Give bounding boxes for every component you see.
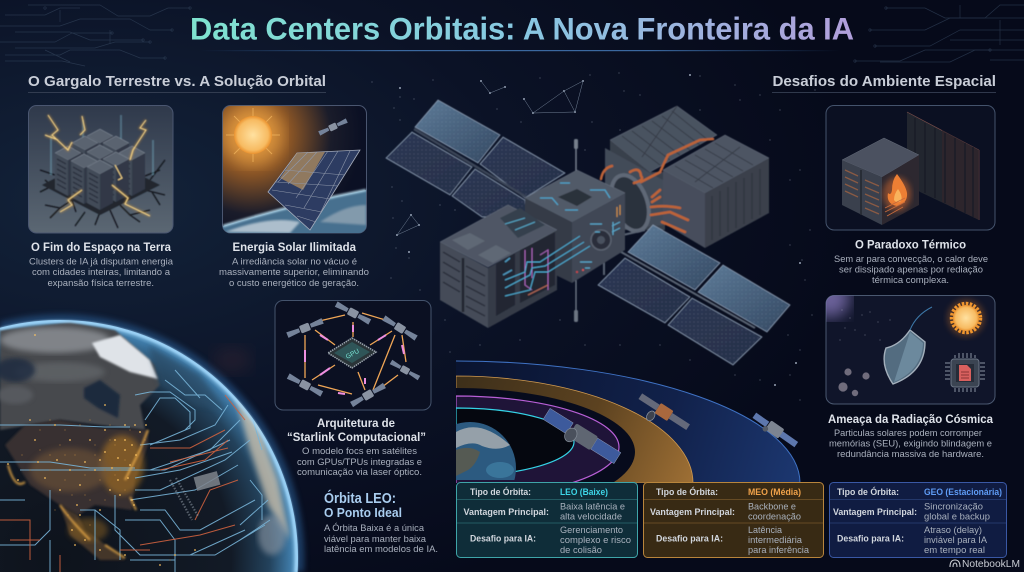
icon: satellite <box>318 118 348 136</box>
table: LEO: de colisão <box>560 545 602 556</box>
text: órbita LEO: O Ponto Ideal <box>324 505 402 520</box>
table: LEO: Tipo de Órbita: <box>470 486 531 498</box>
title: Data Centers Orbitais: A Nova Fronteira da IA <box>190 10 854 46</box>
icon: server cluster with cracks and lightning <box>40 115 165 228</box>
laser links <box>305 313 406 394</box>
text: órbita LEO <box>324 489 438 555</box>
table: MEO: para inferência <box>748 545 810 556</box>
text: starlink computacional: Arquitetura de <box>317 418 395 430</box>
icon: memory chip <box>945 353 985 392</box>
main earth illustration <box>0 314 304 572</box>
icon: LEO satellite <box>540 407 622 469</box>
central module <box>525 170 625 283</box>
text: radiação cósmica: Ameaça da Radiação Cósmica <box>828 414 994 426</box>
icon: gpu chip: GPU <box>345 348 361 361</box>
table: LEO: complexo e risco <box>560 535 631 546</box>
decorative circuit traces top-left <box>0 5 191 66</box>
icon: solar particles <box>838 368 870 396</box>
text: fim do espaço: expansão física terrestre. <box>48 278 154 289</box>
GEO orbit line <box>456 361 800 483</box>
table: MEO: intermediária <box>748 535 803 546</box>
text: energia solar: Energia Solar Ilimitada <box>232 242 357 254</box>
table: LEO: Vantagem Principal: <box>464 507 549 518</box>
array boom <box>600 230 755 328</box>
heading: desafios: Desafios do Ambiente Espacial <box>772 73 996 90</box>
table: MEO: Latência <box>748 525 783 536</box>
icon: radiator <box>907 112 979 220</box>
text: starlink computacional: com GPUs/TPUs integradas e <box>297 457 422 468</box>
icon: gpu chip <box>328 338 376 368</box>
icon: sun <box>947 299 985 337</box>
decorative circuit traces top-right <box>854 5 1024 62</box>
icon: solar panel <box>268 150 360 230</box>
table: GEO: global e backup <box>924 512 990 522</box>
table: GEO: inviável para IA <box>924 535 988 546</box>
text: fim do espaço: O Fim do Espaço na Terra <box>31 242 172 254</box>
icon: shield <box>884 307 932 384</box>
constellations <box>397 81 583 235</box>
solar array: lower right <box>598 225 790 365</box>
text: órbita LEO: Órbita LEO: <box>324 489 396 507</box>
icon: GEO satellite <box>750 411 799 451</box>
icon: MEO satellite <box>632 391 691 441</box>
table: MEO: Vantagem Principal: <box>650 507 735 518</box>
table: MEO: coordenação <box>748 512 801 522</box>
table: GEO: Vantagem Principal: <box>833 507 917 518</box>
text: paradoxo térmico: Sem ar para convecção, o calor deve <box>834 254 988 265</box>
text: starlink computacional: comunicação via laser óptico. <box>297 467 422 478</box>
table: GEO: Desafio para IA: <box>837 534 904 544</box>
text: órbita LEO: latência em modelos de IA. <box>324 544 438 555</box>
table: LEO: alta velocidade <box>560 512 622 522</box>
table: GEO: Sincronização <box>924 502 983 512</box>
table: MEO: Tipo de Órbita: <box>656 486 718 498</box>
icon: sun <box>223 105 283 165</box>
text: órbita LEO: viável para manter baixa <box>324 534 427 545</box>
text: energia solar <box>219 242 369 289</box>
icon: overheating cube <box>842 138 919 225</box>
text: energia solar: massivamente superior, eliminando <box>219 267 369 278</box>
table: GEO: GEO (Estacionária) <box>924 487 1002 498</box>
table: LEO: Gerenciamento <box>560 525 623 536</box>
text: fim do espaço <box>29 242 174 289</box>
MEO inner gap <box>456 388 635 482</box>
coolant pipes <box>601 139 713 232</box>
text: starlink computacional: “Starlink Computacional” <box>287 432 426 444</box>
text: fim do espaço: com cidades inteiras, limitando a <box>32 267 171 278</box>
solar array: upper left <box>386 100 565 217</box>
text: órbita LEO: A Órbita Baixa é a única <box>324 523 425 534</box>
GEO orbit band <box>456 361 800 483</box>
radiator block: front <box>663 135 769 248</box>
text: radiação cósmica: memórias (SEU), exigindo blindagem e <box>829 438 992 450</box>
icons: satellites <box>286 301 421 408</box>
server module <box>440 205 590 328</box>
table: GEO: Tipo de Órbita: <box>837 486 899 498</box>
text: paradoxo térmico: O Paradoxo Térmico <box>855 240 966 252</box>
orbit diagram <box>456 360 800 483</box>
text: energia solar: o custo energético de geração. <box>229 278 359 289</box>
table: MEO: Desafio para IA: <box>656 534 723 544</box>
LEO inner ring <box>456 408 574 476</box>
table: GEO: Atraso (delay) <box>924 525 982 536</box>
table: LEO: Desafio para IA: <box>470 534 536 544</box>
table: LEO: LEO (Baixe) <box>560 487 608 498</box>
table: LEO <box>456 482 638 558</box>
text: radiação cósmica: Particulas solares podem corromper <box>834 428 982 439</box>
table: MEO: MEO (Média) <box>748 487 801 498</box>
icon: earth horizon <box>223 190 366 233</box>
docking collar <box>604 148 665 236</box>
table: GEO: em tempo real <box>924 545 985 556</box>
text: starlink computacional <box>287 418 426 478</box>
radiator block: rear <box>610 106 717 200</box>
central satellite illustration <box>386 100 790 365</box>
text: radiação cósmica <box>828 414 994 460</box>
table: LEO: Baixa latência e <box>560 502 625 512</box>
text: starlink computacional: O modelo focs em satélites <box>302 446 417 457</box>
panel: radiação cósmica <box>826 295 996 404</box>
text: fim do espaço: Clusters de IA já disputam energia <box>29 256 174 268</box>
table: MEO: Backbone e <box>748 502 796 512</box>
heading: gargalo terrestre: O Gargalo Terrestre vs. A Solução Orbital <box>28 73 326 90</box>
panel: starlink computacional <box>275 300 431 410</box>
LEO orbit band <box>456 395 620 483</box>
circuit overlay <box>0 370 270 572</box>
antenna mast <box>574 139 578 322</box>
panel: paradoxo térmico <box>826 106 995 230</box>
notebooklm credit: NotebookLM <box>962 559 1020 570</box>
stars <box>372 73 815 400</box>
panel: energia solar <box>222 105 366 233</box>
text: paradoxo térmico <box>834 240 988 286</box>
icon: small earth <box>456 422 516 480</box>
text: energia solar: A irrediância solar no vácuo é <box>232 256 357 268</box>
MEO orbit band <box>456 376 693 483</box>
text: radiação cósmica: redundância massiva de hardware. <box>837 449 984 460</box>
panel: fim do espaço <box>28 106 173 233</box>
table: GEO <box>830 482 1006 558</box>
table: MEO <box>644 482 824 558</box>
text: paradoxo térmico: térmica complexa. <box>872 275 949 286</box>
text: paradoxo térmico: ser dissipado apenas por rediação <box>839 264 983 276</box>
